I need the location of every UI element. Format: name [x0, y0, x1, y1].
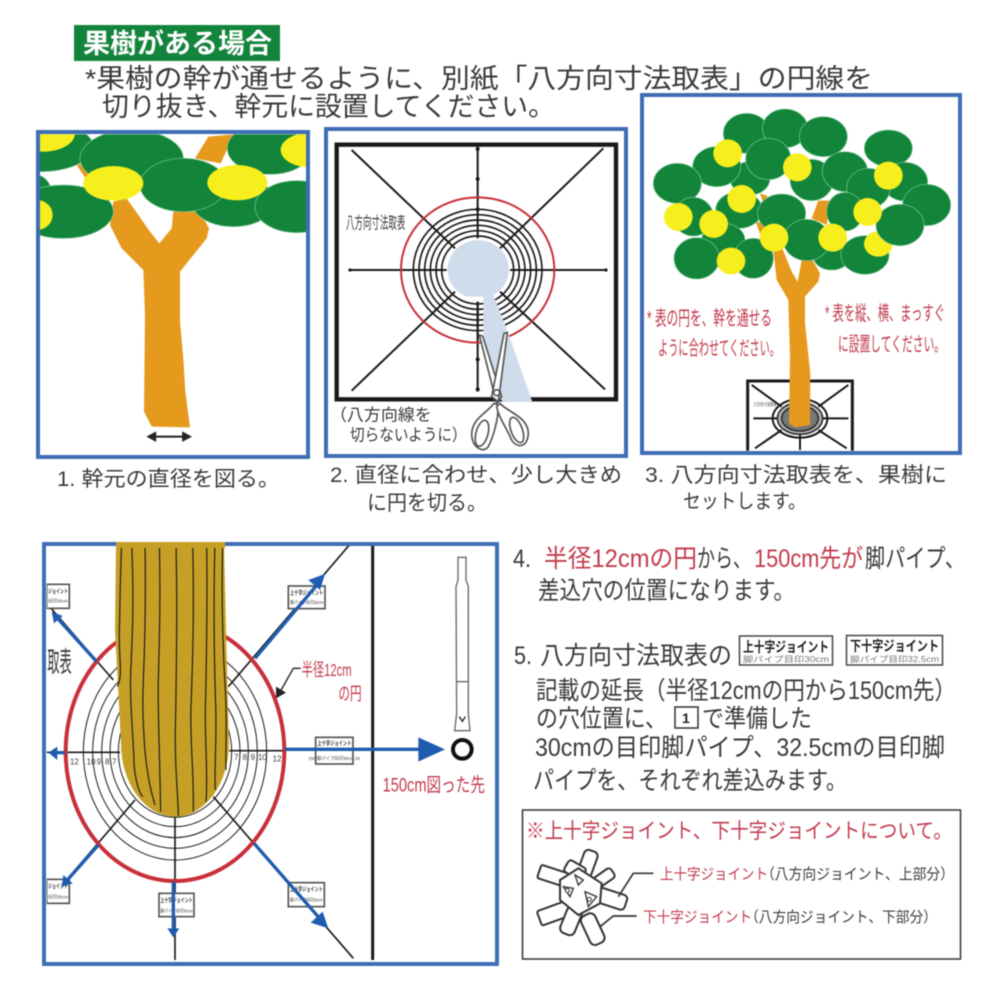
tag: step 1 reference: 1	[682, 710, 690, 726]
joint labels: 脚パイプ目印30cm	[290, 897, 323, 904]
panel 2: cutting the circle	[326, 129, 626, 456]
step 4 text: 半径12cmの円	[544, 545, 697, 573]
label: measured 150cm: 150cm図った先	[383, 775, 485, 797]
intro text	[85, 64, 873, 122]
joint labels: 上十字ジョイント	[290, 589, 323, 597]
red note: left: * 表の円を、幹を通せる	[647, 307, 772, 330]
icon: scissors	[472, 333, 528, 450]
caption 2: 2. 直径に合わせ、少し大きめ	[330, 464, 622, 487]
step 4 text: から、	[697, 545, 751, 573]
red note: right	[825, 302, 945, 356]
tag: lower cross joint	[846, 636, 942, 665]
panel 3 border	[642, 95, 960, 453]
scale numbers: 9	[97, 757, 102, 766]
joint labels: ジョイント	[48, 588, 68, 595]
panel 1: trunk diameter	[35, 129, 311, 460]
label: upper cross joint	[660, 866, 954, 883]
trunk with bark lines	[115, 543, 229, 817]
scale numbers: 8	[243, 753, 248, 762]
measuring sheet with cut-out circle	[330, 145, 616, 450]
step 4 text	[513, 545, 965, 605]
joint labels	[47, 584, 361, 917]
tag: lower cross joint: 下十字ジョイント	[850, 638, 939, 654]
joint labels: 上十字ジョイント	[290, 886, 323, 894]
illustration: fruit tree	[653, 109, 951, 453]
scale numbers: 12	[70, 757, 79, 766]
joints panel title: ※上十字ジョイント、下十字ジョイントについて。	[526, 820, 952, 843]
tag: upper cross joint: 脚パイプ目印30cm	[743, 654, 829, 664]
scale numbers: 8	[105, 757, 110, 766]
note: do not cut lines: 切らないように）	[350, 426, 467, 445]
step 4 text: 差込穴の位置になります。	[538, 577, 795, 605]
icon: leg pipe	[455, 557, 470, 731]
diagram: trunk on sheet with arrows: 取表	[47, 647, 72, 678]
panel 1 border	[38, 132, 308, 457]
note: do not cut lines	[330, 406, 467, 445]
label: upper cross joint: 上十字ジョイント	[660, 866, 768, 883]
joint labels: 脚パイプ目印30cm	[160, 908, 193, 915]
scale numbers: 12	[273, 755, 282, 764]
step 5 text: パイプを、それぞれ差込みます。	[533, 767, 847, 795]
label: upper cross joint: （八方向ジョイント、上部分）	[761, 866, 954, 883]
scale numbers: 7	[234, 753, 239, 762]
caption 2: に円を切る。	[367, 492, 487, 515]
panel 2 border	[326, 129, 626, 456]
panel 4 trunk overlap at top edge	[116, 542, 225, 548]
joint labels: 150 脚パイプ目印30cm 20	[308, 755, 361, 762]
joint labels: 上十字ジョイント	[317, 740, 351, 748]
arrow: trunk width	[147, 432, 192, 442]
tag: lower cross joint: 脚パイプ目印32.5cm	[850, 654, 939, 664]
heading: 果樹がある場合: 果樹がある場合	[83, 28, 272, 59]
tag: upper cross joint	[740, 636, 832, 665]
icon: insertion hole	[453, 740, 472, 759]
label: lower cross joint	[643, 909, 937, 926]
step 5 text: 5.	[514, 642, 532, 670]
label: radius 12cm circle	[276, 660, 362, 704]
joint labels: 脚パイプ目印30cm	[290, 599, 324, 606]
panel 4 border	[44, 544, 497, 964]
note: do not cut lines: （八方向線を	[330, 406, 432, 425]
joint labels: 目印30cm	[48, 893, 68, 900]
step 4 text: 150cm先が	[754, 545, 863, 573]
sheet title: 八方向寸法取表	[346, 213, 406, 232]
blue arrows	[48, 574, 445, 937]
intro text: *果樹の幹が通せるように、別紙「八方向寸法取表」の円線を	[85, 64, 873, 94]
label: radius 12cm circle: 半径12cm	[302, 660, 352, 680]
step 4 text: 脚パイプ、	[865, 545, 965, 573]
diagram: trunk on sheet with arrows	[47, 543, 485, 960]
red note: left	[647, 307, 780, 360]
step 5 text: で準備した	[702, 705, 812, 733]
step 5 text: 八方向寸法取表の	[540, 642, 732, 670]
scale numbers	[70, 753, 282, 766]
red note: left: ように合わせてください。	[658, 337, 780, 360]
scale numbers: 9	[251, 753, 256, 762]
illustration: fruit tree: 八方向寸法取表	[753, 401, 777, 408]
step 5 text	[514, 636, 956, 795]
caption 3: セットします。	[683, 491, 806, 513]
panel 3: whole tree with sheet	[642, 95, 960, 453]
joint labels: 目印30cm	[48, 598, 68, 605]
scale numbers: 10	[258, 753, 267, 762]
scale numbers: 10	[87, 757, 96, 766]
joint labels: ジョイント	[48, 883, 68, 890]
icon: eight-way joint	[537, 849, 653, 947]
step 5 text: 30cmの目印脚パイプ、32.5cmの目印脚	[535, 734, 945, 762]
caption 2	[330, 464, 622, 515]
intro text: 切り抜き、幹元に設置してください。	[102, 92, 555, 122]
label: radius 12cm circle: の円	[338, 684, 362, 704]
panel: about the joints	[522, 810, 960, 959]
illustration: tree crown and trunk	[39, 134, 307, 428]
label: lower cross joint: 下十字ジョイント	[643, 909, 752, 926]
tag: upper cross joint: 上十字ジョイント	[743, 639, 829, 655]
caption 1: 1. 幹元の直径を図る。	[57, 468, 280, 491]
joint labels: 上十字ジョイント	[160, 897, 193, 905]
scale numbers: 7	[112, 757, 117, 766]
step 4 text: 4.	[513, 545, 531, 573]
tag: step 1 reference	[675, 707, 698, 728]
label: lower cross joint: （八方向ジョイント、下部分）	[745, 909, 937, 926]
step 5 text: の穴位置に、	[536, 705, 667, 733]
caption 3: 3. 八方向寸法取表を、果樹に	[645, 464, 947, 487]
panel 4: measuring 150cm	[44, 542, 497, 964]
caption 3	[645, 464, 947, 513]
